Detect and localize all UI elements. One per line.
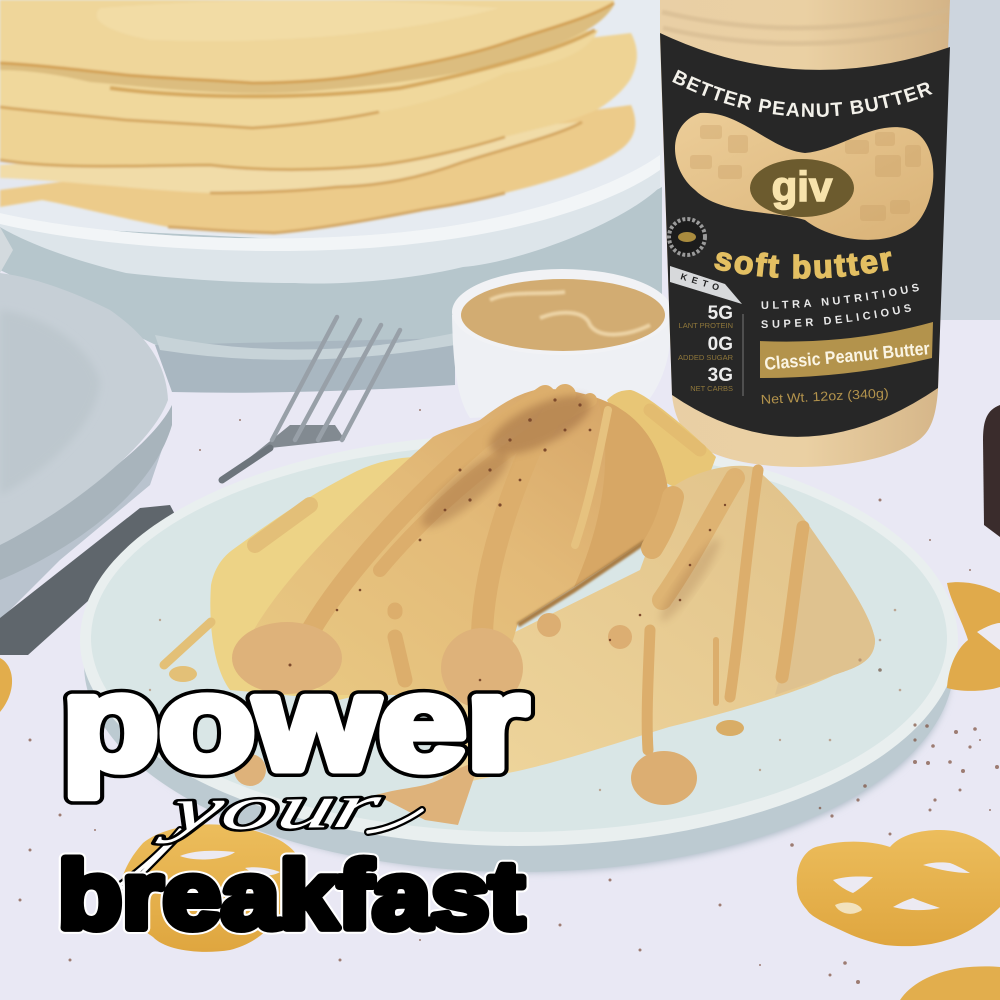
fork (222, 317, 400, 480)
stacked side plates (0, 227, 172, 620)
flavor band (760, 322, 933, 378)
peanut illustration (675, 113, 933, 240)
word: power: power (62, 649, 528, 798)
upper flap behind crepes (607, 390, 716, 500)
specks on the main plate (149, 609, 901, 791)
word: your: your (154, 771, 388, 844)
jar label (660, 33, 950, 437)
keto banner: KETO (679, 271, 725, 294)
jar of peanut butter (660, 0, 950, 467)
pretzel bottom right (797, 830, 1000, 946)
nutrition stats: ADDED SUGAR (678, 353, 734, 362)
flavor band: Classic Peanut Butter (763, 338, 931, 374)
word: power: power (62, 649, 528, 798)
small pretzel crumb left edge (0, 658, 12, 712)
dark bottle at right edge (983, 405, 1000, 537)
net weight: Net Wt. 12oz (340g) (760, 385, 889, 407)
drizzle (164, 395, 803, 750)
speckles on table (18, 409, 999, 984)
nutrition stats: 5G (708, 303, 733, 324)
crepes drizzled with peanut butter (164, 384, 875, 825)
nutrition stats: NET CARBS (690, 384, 733, 393)
nutrition stats: 3G (708, 365, 733, 386)
round badge (669, 219, 705, 255)
giv oval logo: giv (772, 163, 833, 210)
background: upper right box (940, 0, 1000, 320)
knife (0, 505, 178, 655)
left yellow flap (210, 457, 480, 700)
pancake stack (0, 0, 637, 233)
nutrition stats (678, 303, 743, 396)
headline: power your breakfast (58, 649, 528, 949)
nutmeg dust (288, 384, 726, 681)
word: breakfast: breakfast (58, 842, 524, 949)
pretzel bottom left (120, 824, 301, 952)
nutrition stats: 0G (708, 334, 733, 355)
left rolled crepe (238, 389, 669, 700)
main plate (80, 434, 958, 872)
tagline: SUPER DELICIOUS (761, 304, 911, 328)
word: your (115, 771, 422, 890)
nutrition stats: LANT PROTEIN (679, 321, 733, 330)
giv oval logo (750, 159, 854, 217)
pretzel bottom edge (900, 966, 1000, 1000)
ramekin of peanut butter (452, 269, 672, 418)
soft butter wordmark: soft butter (714, 251, 892, 280)
word: breakfast: breakfast (58, 842, 524, 949)
right crepe (440, 466, 875, 790)
tagline (761, 284, 919, 328)
label heading: BETTER PEANUT BUTTER (672, 70, 933, 117)
plate under pancakes (0, 0, 662, 284)
jar body (660, 0, 950, 467)
pretzel right edge (947, 582, 1000, 691)
keto banner (670, 266, 742, 304)
placemat behind plates (0, 170, 662, 393)
tagline: ULTRA NUTRITIOUS (762, 284, 919, 309)
